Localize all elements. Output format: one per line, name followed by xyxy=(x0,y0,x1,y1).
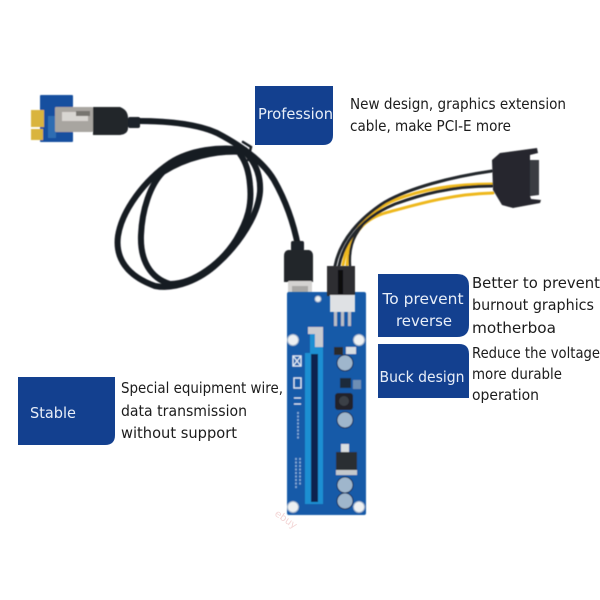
heading: Stable: Stable xyxy=(30,404,76,422)
board body xyxy=(287,292,366,515)
panel: Profession callout xyxy=(255,86,566,145)
text block: Buck design description xyxy=(472,344,600,404)
heading: To prevent reverse: reverse xyxy=(396,312,452,330)
small components xyxy=(334,347,361,475)
heading: To prevent reverse xyxy=(382,290,464,330)
mounting holes xyxy=(288,296,364,512)
heading: Profession: Profession xyxy=(258,105,333,123)
board silkscreen xyxy=(296,412,300,488)
text block: Stable description: Special equipment wire, xyxy=(121,379,283,397)
SATA connector xyxy=(492,148,541,208)
label box: Buck design xyxy=(378,344,469,398)
certification marks xyxy=(293,356,301,404)
6-pin power connector xyxy=(327,266,355,312)
text block: Stable description xyxy=(121,379,283,442)
text block: Buck design description: operation xyxy=(472,386,539,404)
label box: Profession xyxy=(255,86,333,145)
text block: Stable description: data transmission xyxy=(121,402,247,420)
text block: Buck design description: more durable xyxy=(472,365,562,383)
USB plug to riser board xyxy=(284,241,313,313)
riser board xyxy=(287,292,366,515)
SATA power cable wires xyxy=(335,171,493,266)
heading: To prevent reverse: To prevent xyxy=(382,290,464,308)
panel: Buck design callout xyxy=(378,344,600,404)
text block: Profession description xyxy=(350,95,566,135)
label box: Stable xyxy=(18,377,115,445)
text block: Stable description: without support xyxy=(121,424,237,442)
USB cable with loop xyxy=(118,121,298,287)
heading: Buck design: Buck design xyxy=(380,368,464,386)
panel: Stable callout xyxy=(18,377,283,445)
text block: Profession description: New design, graphics extension xyxy=(350,95,566,113)
label box: To prevent reverse xyxy=(378,274,469,337)
text block: To prevent description: motherboa xyxy=(472,319,556,337)
PCI-E x16 slot xyxy=(305,327,323,504)
6-pin header pins xyxy=(334,311,351,326)
PCI-E 1x adapter card xyxy=(31,95,140,142)
text block: Profession description: cable, make PCI-E more xyxy=(350,117,511,135)
capacitors xyxy=(337,355,353,509)
panel: To prevent reverse callout xyxy=(378,274,600,337)
watermark: ebuy xyxy=(272,508,299,532)
text block: To prevent description xyxy=(472,274,600,337)
